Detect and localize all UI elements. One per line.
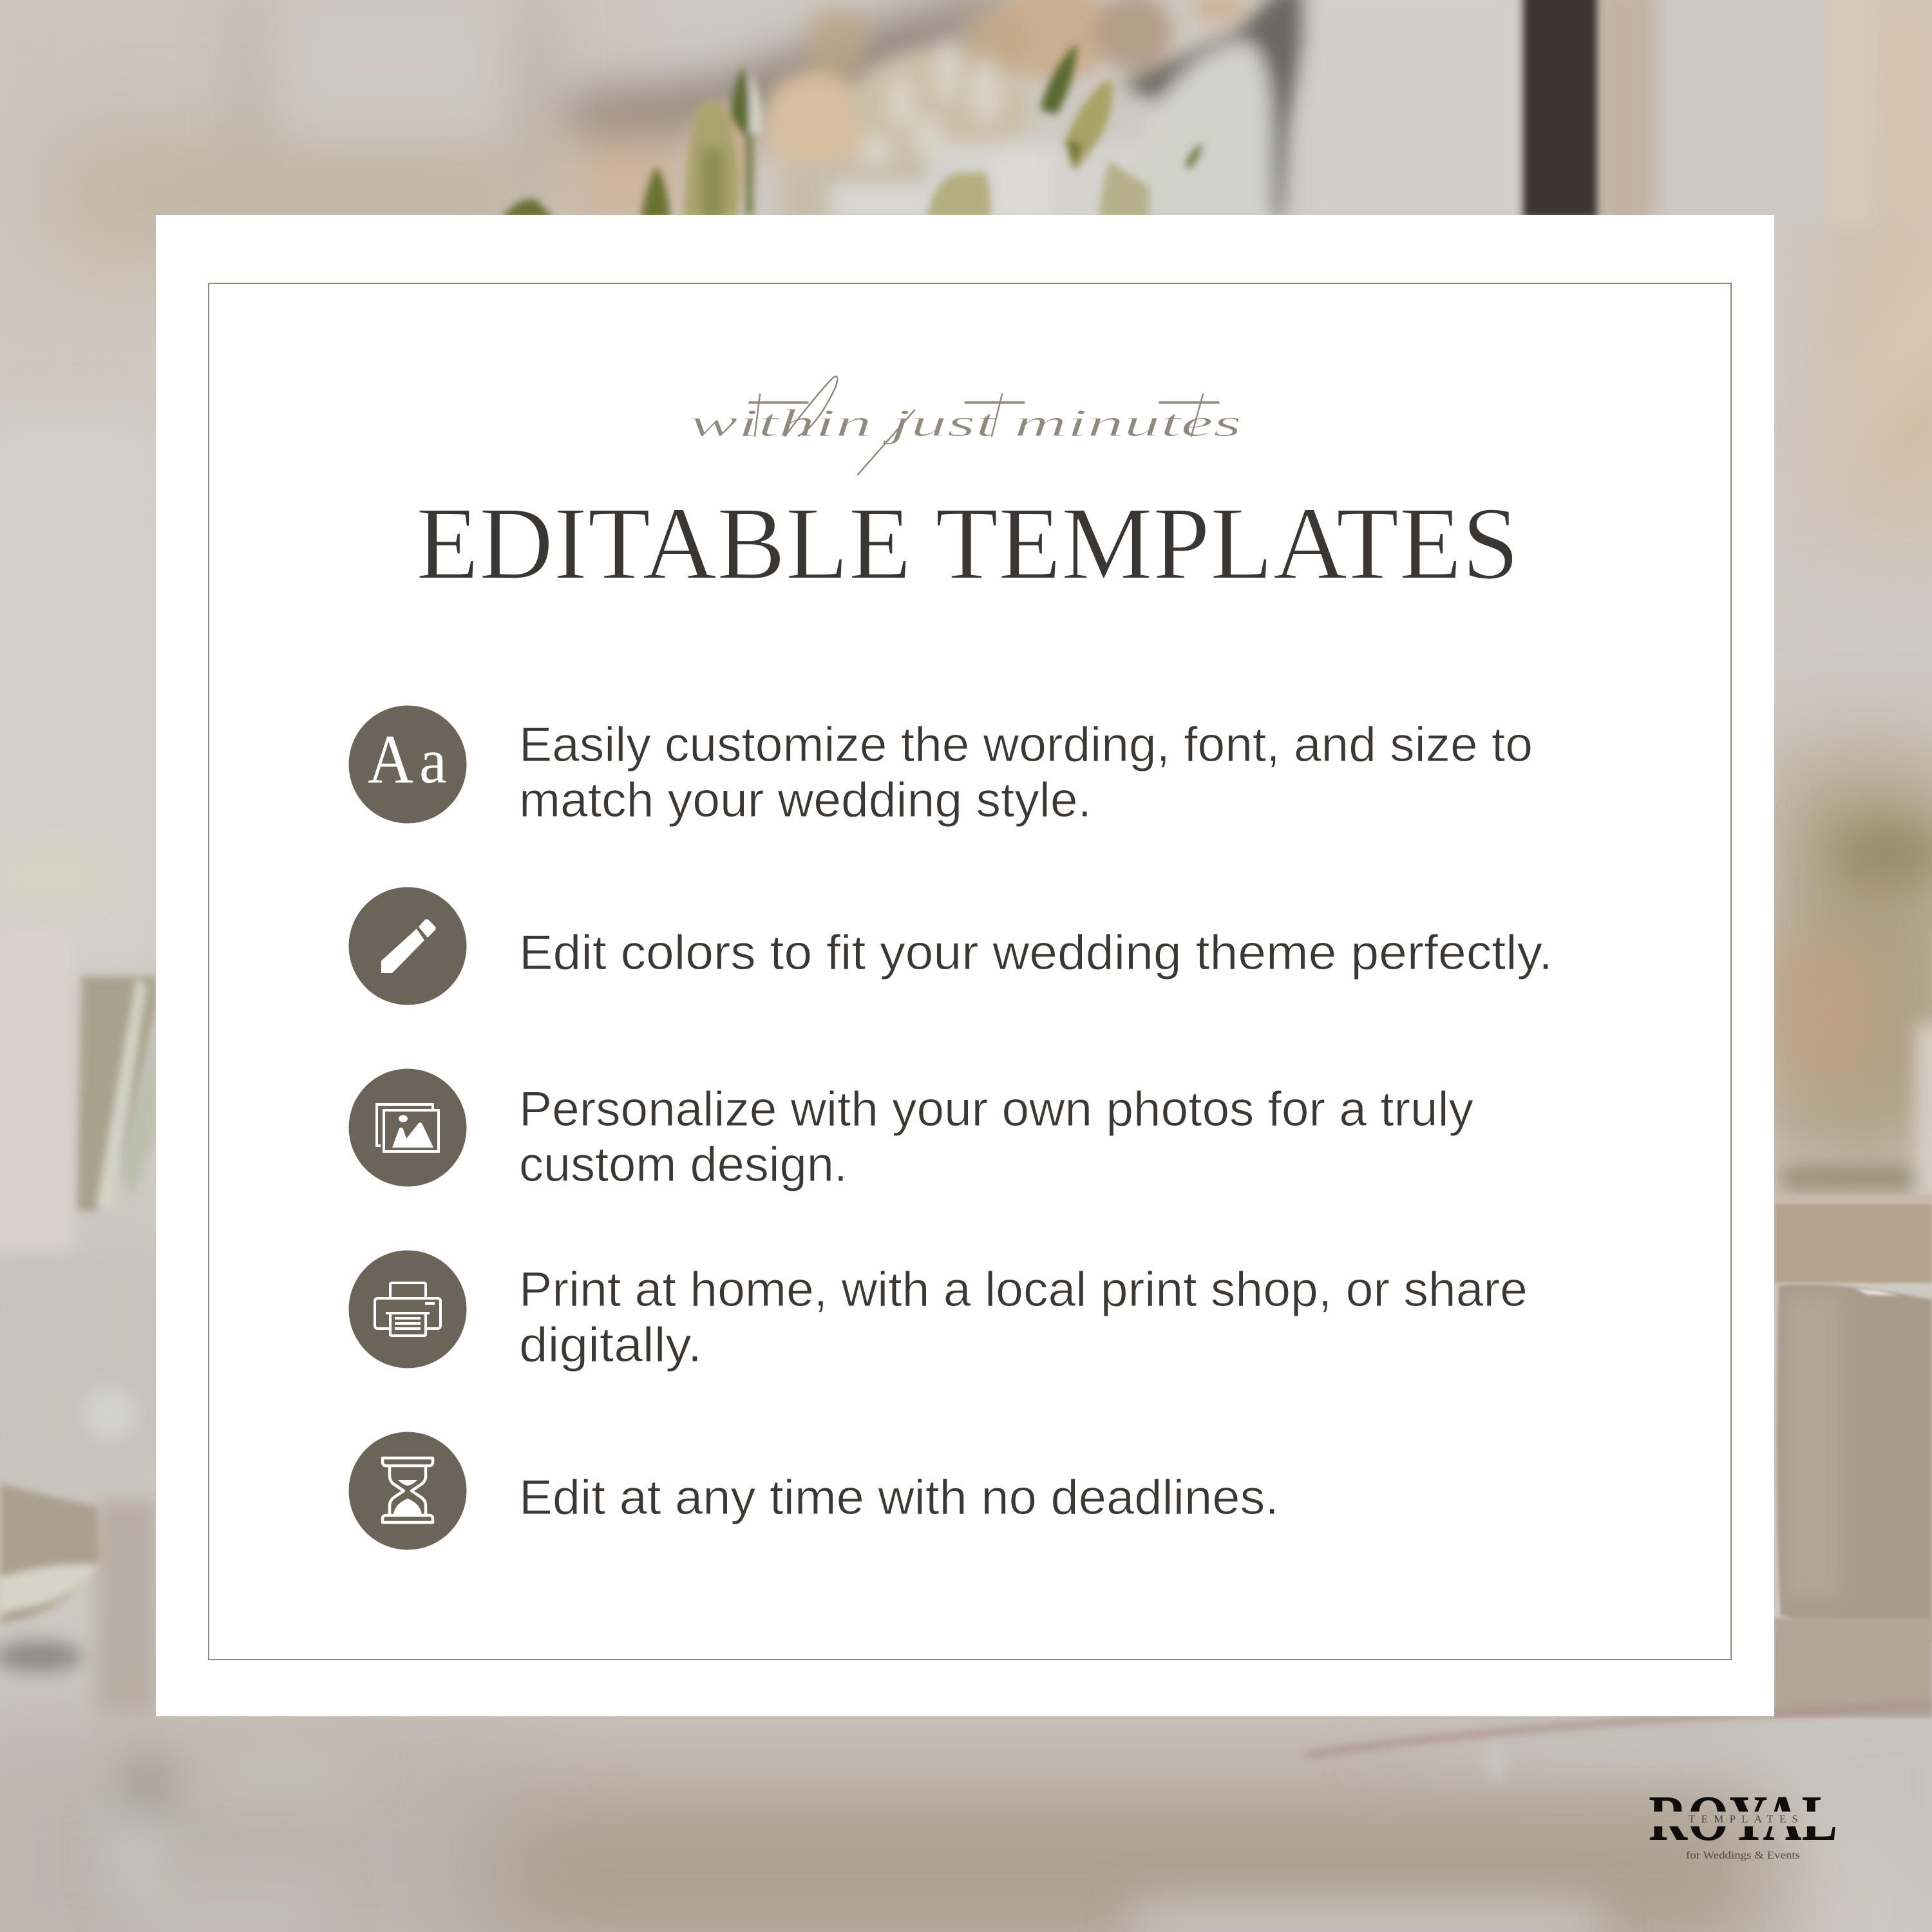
icon: Aa type: a xyxy=(419,725,447,797)
text: personalize photos xyxy=(519,1082,1473,1192)
icon: hourglass xyxy=(349,1432,466,1549)
icon: printer xyxy=(349,1251,466,1368)
text: personalize photos: custom design. xyxy=(519,1137,848,1192)
text: print options: Print at home, with a local print shop, or share xyxy=(519,1262,1528,1317)
feature row 2: edit colors xyxy=(349,887,1553,1005)
text: edit colors: Edit colors to fit your wedding theme perfectly. xyxy=(519,925,1553,980)
text: customize wording: Easily customize the wording, font, and size to xyxy=(519,717,1533,772)
window post xyxy=(1523,0,1597,219)
pink ribbon line on the table xyxy=(1307,1705,1932,1755)
feature row 3: personalize photos xyxy=(349,1069,1473,1192)
logo: Royal Templates: ROYAL xyxy=(1649,1782,1837,1854)
icon: pencil xyxy=(349,887,466,1005)
logo: Royal Templates xyxy=(1649,1797,1835,1861)
icon: Aa type: A xyxy=(368,721,413,798)
icon: Aa type xyxy=(349,706,466,823)
feature row 1: customize wording xyxy=(349,706,1533,828)
text: print options: digitally. xyxy=(519,1318,702,1372)
text: customize wording: match your wedding style. xyxy=(519,773,1092,828)
icon: photos xyxy=(349,1069,466,1186)
text: print options xyxy=(519,1262,1528,1372)
title: EDITABLE TEMPLATES xyxy=(416,486,1519,601)
panel: white card xyxy=(156,215,1774,1716)
text: no deadlines: Edit at any time with no deadlines. xyxy=(519,1470,1279,1525)
text: customize wording xyxy=(519,717,1533,828)
subtitle: script line: within just minutes xyxy=(689,402,1242,444)
logo: Royal Templates: for Weddings & Events xyxy=(1686,1849,1800,1861)
inner thin border xyxy=(209,283,1731,1660)
subtitle: script line xyxy=(689,377,1242,475)
logo: Royal Templates: TEMPLATES xyxy=(1689,1813,1798,1825)
feature row 5: no deadlines xyxy=(349,1432,1279,1549)
feature row 4: print xyxy=(349,1251,1528,1372)
text: personalize photos: Personalize with your own photos for a truly xyxy=(519,1082,1473,1137)
